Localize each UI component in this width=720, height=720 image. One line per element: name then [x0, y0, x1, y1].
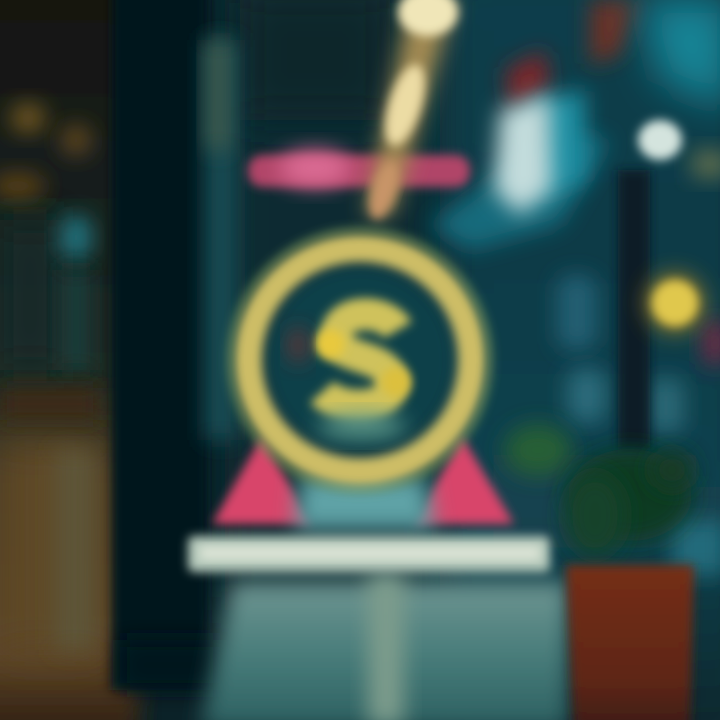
- floor: [200, 582, 568, 720]
- white lamp: [638, 120, 682, 160]
- right side building details: [430, 0, 720, 575]
- light beam: [364, 0, 458, 222]
- gold ring with dollar sign: [230, 230, 490, 490]
- white illuminated bar: [188, 536, 550, 572]
- plant: [504, 424, 694, 557]
- yellow lamp: [645, 273, 705, 333]
- left wall with warm lights: [0, 103, 100, 655]
- flower pot: [566, 565, 694, 720]
- dark column: [112, 0, 238, 690]
- pink sign: [248, 150, 470, 187]
- right pole: [618, 170, 650, 450]
- pink triangles: [212, 436, 514, 530]
- red and white banner shape: [494, 50, 585, 215]
